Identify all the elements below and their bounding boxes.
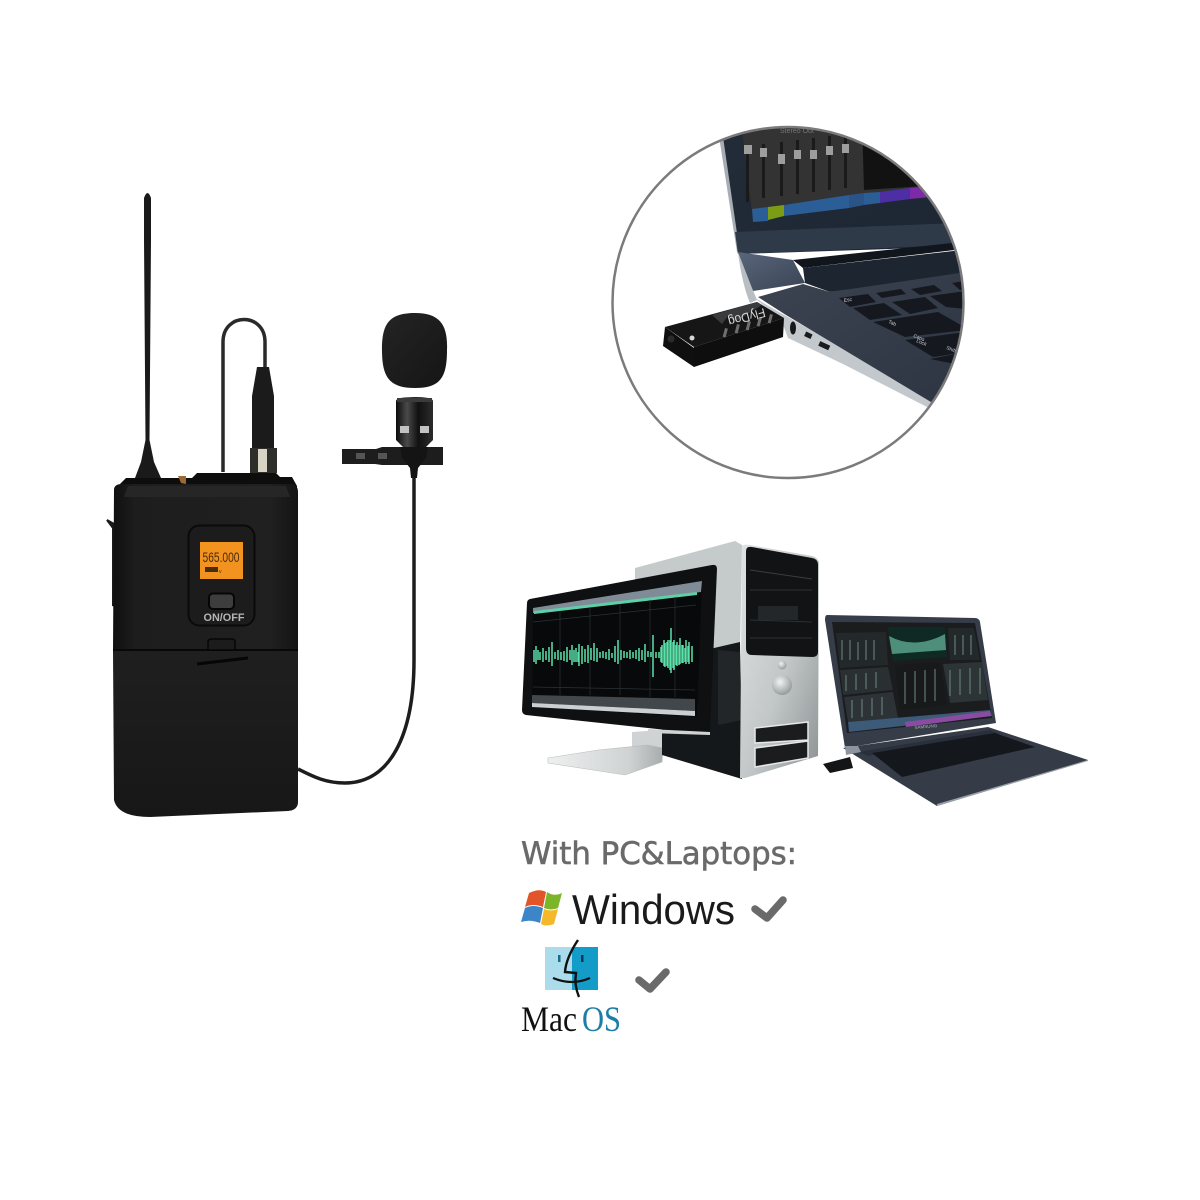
- drive bay panel: [746, 547, 818, 657]
- software panels: [836, 627, 992, 732]
- bodypack transmitter: [107, 193, 298, 817]
- key labels: Esc: [843, 297, 853, 304]
- microphone cable loop and connector: [223, 320, 277, 473]
- monitor stand: [548, 730, 663, 775]
- channel labels: [752, 186, 930, 222]
- transmitter top cap: [118, 473, 297, 490]
- front vents: [755, 722, 808, 767]
- mic capsule: [396, 397, 433, 478]
- Mac OS wordmark: OS: [582, 999, 621, 1039]
- on/off label: ON/OFF: [204, 612, 245, 624]
- icon: Finder: [545, 940, 598, 997]
- mixer software on screen: [742, 128, 927, 222]
- panel detail: [842, 635, 980, 718]
- icon: Windows flag: [521, 890, 562, 926]
- transmitter upper body: [113, 484, 298, 652]
- Mac OS row: [521, 940, 666, 1039]
- key labels: Lock: [915, 338, 928, 348]
- mixer software on screen: Stereo Out: [780, 128, 814, 135]
- icon: check mark: [755, 900, 783, 918]
- side ports: [790, 322, 830, 350]
- Windows label: Windows: [572, 886, 735, 933]
- laptop base: [843, 727, 1088, 806]
- desktop computer: [522, 541, 819, 779]
- key labels: Caps: [912, 333, 926, 343]
- tie clip: [342, 447, 443, 465]
- LCD display: v: [219, 569, 222, 575]
- dongle brand: FlyDog: [727, 305, 767, 329]
- antenna: [135, 193, 161, 478]
- lavalier microphone: [298, 313, 447, 783]
- on/off button: [209, 594, 234, 609]
- Windows row: [521, 886, 783, 933]
- lower bezel: [735, 224, 952, 254]
- cable: [298, 468, 414, 783]
- key labels: Shift: [945, 345, 957, 355]
- deck silver edge: [755, 298, 935, 407]
- brand: SAMSUNG: [914, 723, 938, 730]
- tower side: [635, 541, 742, 779]
- laptop hinge bar: [738, 243, 954, 303]
- laptop screen: [825, 615, 996, 755]
- monitor: [522, 565, 717, 735]
- tower front: [740, 545, 819, 778]
- small USB dongle: [823, 757, 853, 773]
- laptop with dongle: [823, 615, 1088, 806]
- LCD display: [200, 542, 243, 579]
- control panel: [188, 526, 254, 626]
- transmitter lower battery door: [113, 639, 298, 817]
- laptop keyboard deck: [756, 250, 962, 407]
- dongle vents: [723, 314, 773, 337]
- USB dongle: [663, 302, 784, 367]
- belt clip: [107, 520, 114, 606]
- callout ring: [612, 127, 964, 478]
- key labels: Tab: [887, 319, 897, 328]
- monitor screen with waveform: [532, 581, 702, 717]
- circular callout: dongle plugged into laptop: [612, 112, 980, 478]
- Mac OS wordmark: [521, 999, 621, 1039]
- laptop screen: [720, 128, 952, 254]
- icon: check mark: [639, 972, 666, 989]
- audio waveform: [534, 628, 692, 677]
- key labels: [843, 297, 957, 355]
- heading: With PC&Laptops:: [521, 836, 797, 872]
- callout clipped contents: [663, 128, 962, 407]
- keyboard keys: [839, 282, 962, 364]
- foam windscreen: [382, 313, 447, 388]
- power buttons: [772, 660, 792, 695]
- hinge: [845, 746, 861, 755]
- LCD display: 565.000: [202, 549, 240, 565]
- Mac OS wordmark: Mac: [521, 999, 577, 1039]
- keyboard strip and keyboard: [858, 730, 1000, 756]
